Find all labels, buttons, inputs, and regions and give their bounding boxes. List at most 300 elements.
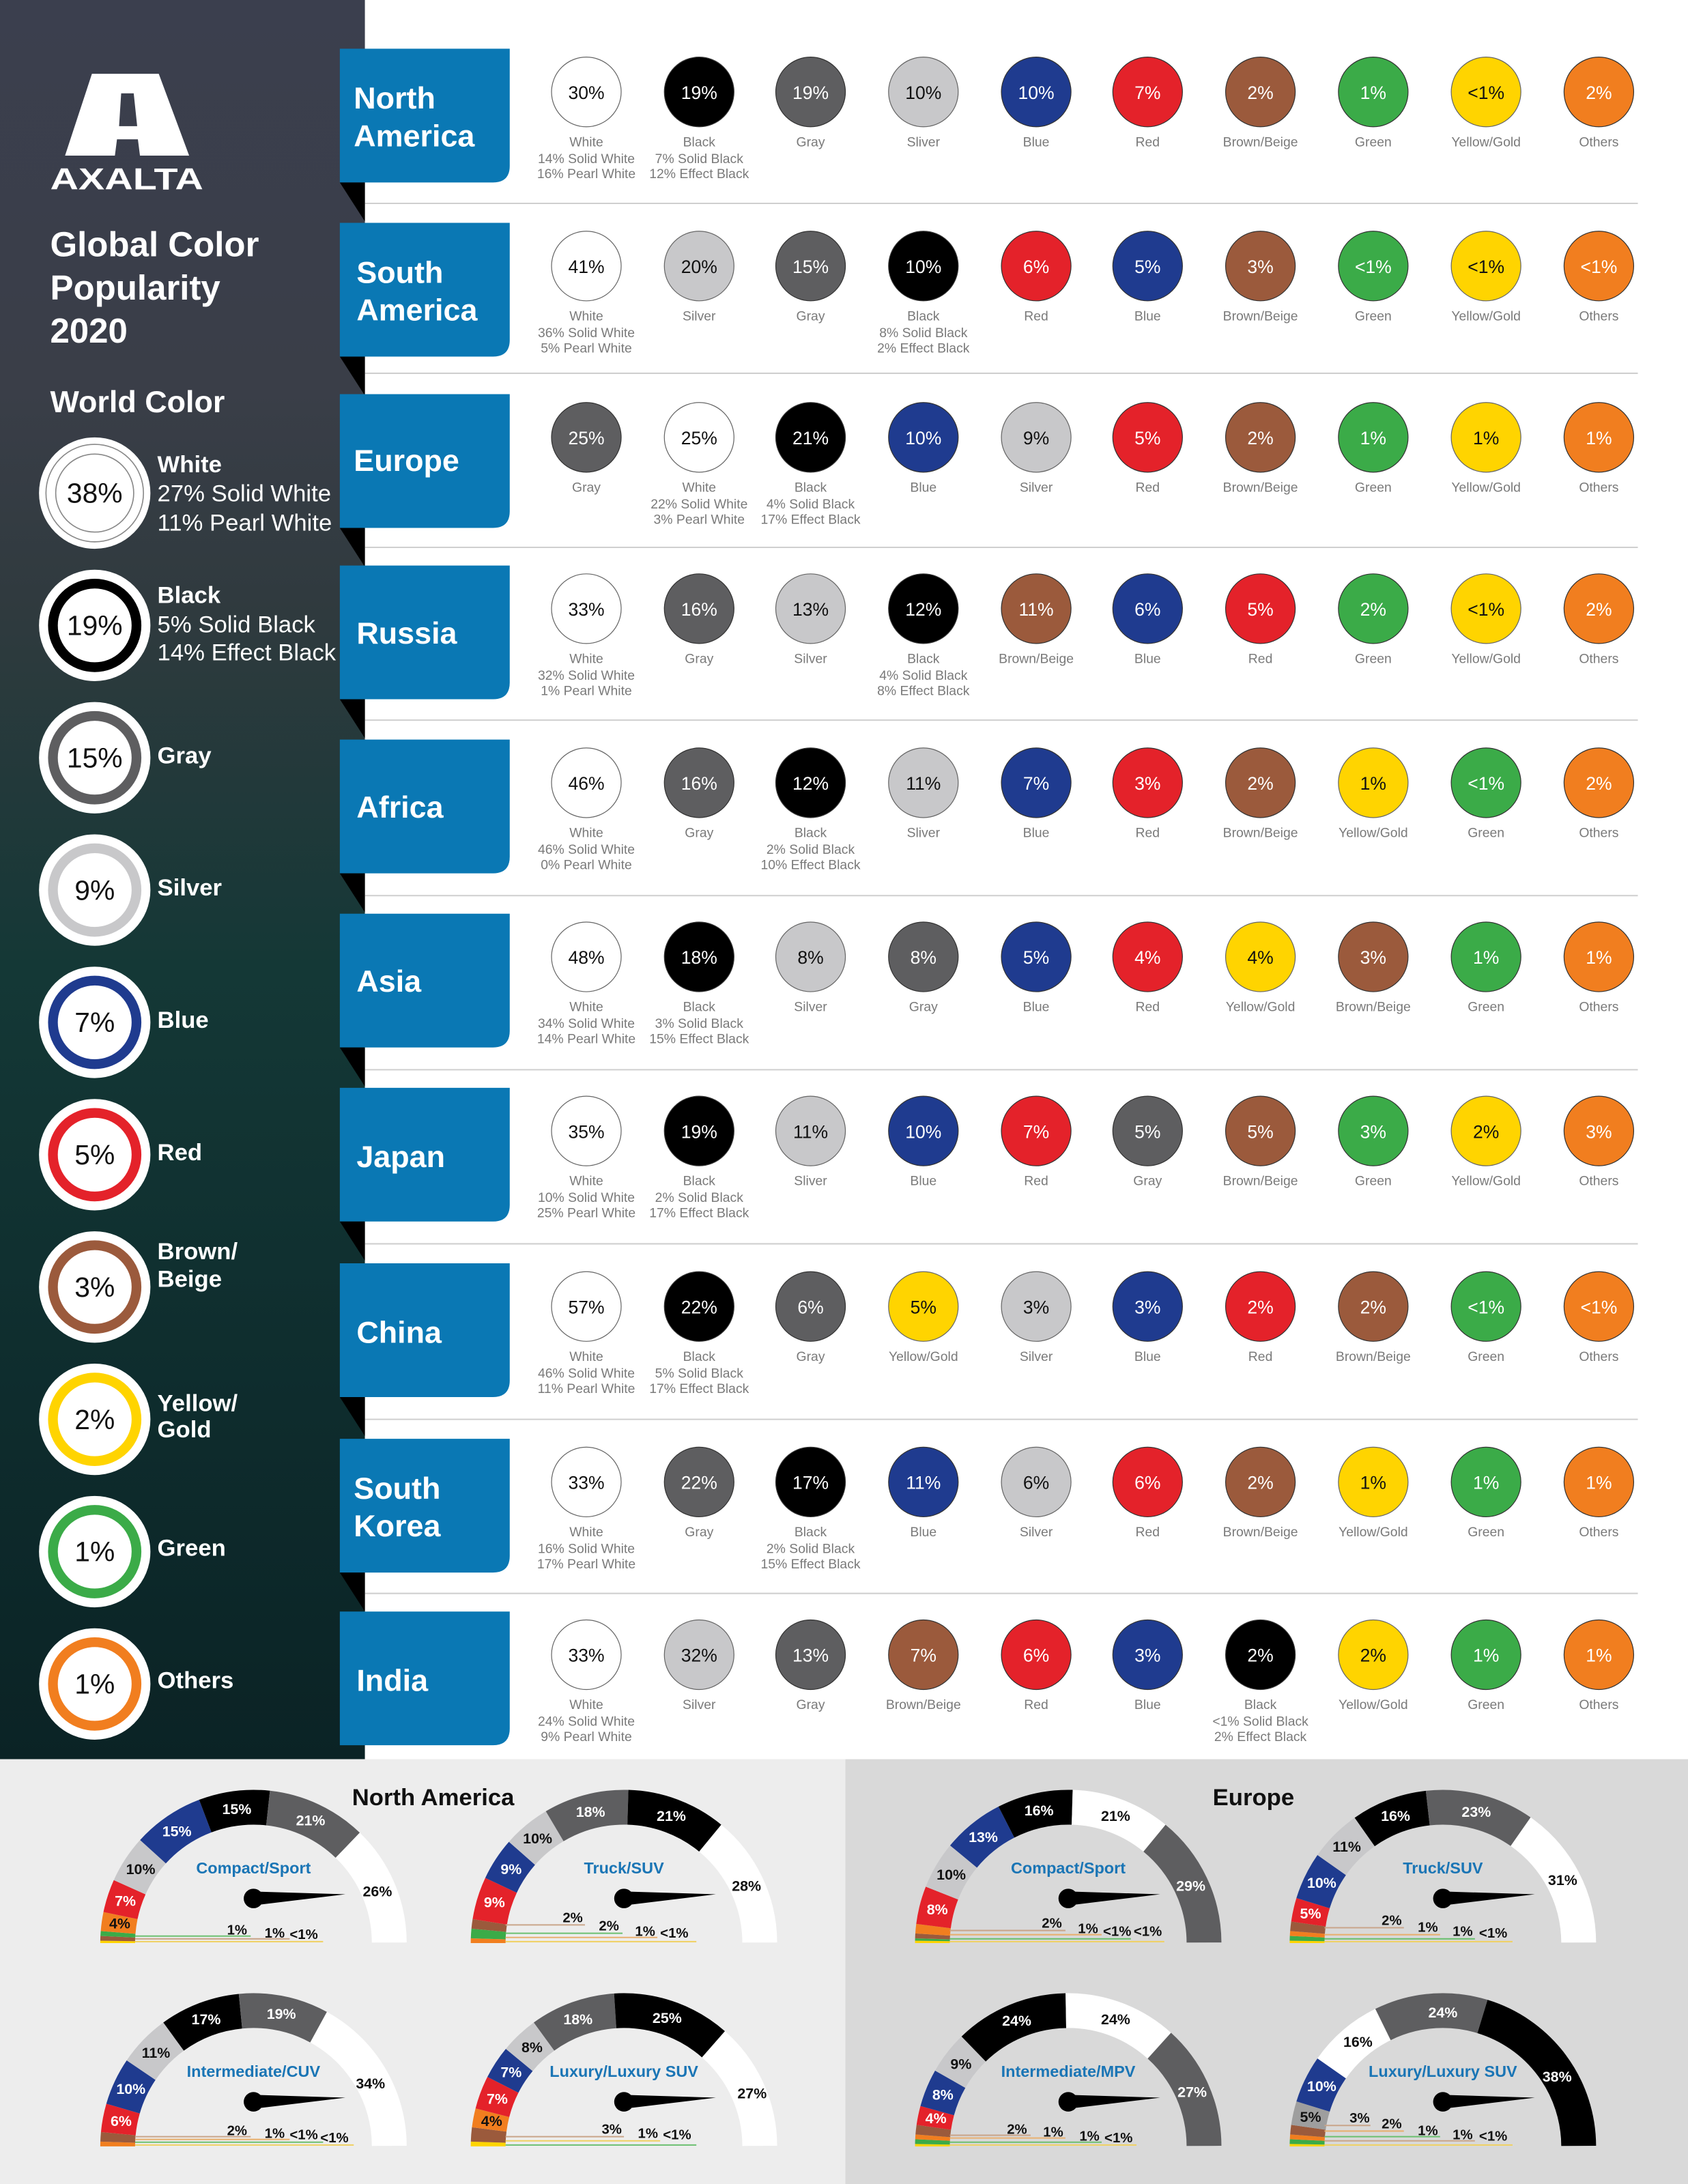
panel: Japan: Blue — [910, 1174, 936, 1189]
panel: South Korea: Brown/Beige — [1223, 1525, 1298, 1540]
title: 2020 — [50, 311, 128, 350]
panel: South America: Blue — [1134, 308, 1161, 324]
panel: North America: Sliver — [907, 134, 941, 149]
panel: India: <1% Solid Black — [1212, 1714, 1308, 1729]
gauge: Luxury/Luxury SUV EU: 5% — [1300, 2109, 1321, 2125]
panel: Africa: 10% Effect Black — [760, 857, 861, 872]
gauge: Luxury/Luxury SUV NA: 25% — [653, 2010, 682, 2026]
panel: North America: <1% — [1468, 83, 1504, 103]
gauge: Compact/Sport EU: 13% — [969, 1829, 998, 1845]
panel: Africa: Sliver — [907, 826, 941, 841]
panel: Russia: Gray — [685, 651, 714, 666]
panel: North America: 2% — [1586, 83, 1612, 103]
panel: Russia: Silver — [794, 651, 827, 666]
panel: Russia: White — [569, 651, 603, 666]
panel: Asia: 5% — [1023, 947, 1049, 968]
panel: North America: 10% — [905, 83, 941, 103]
world ring: silver: Silver — [158, 875, 222, 901]
gauge: Intermediate/CUV NA: 11% — [142, 2045, 170, 2061]
panel: Russia: Brown/Beige — [999, 651, 1074, 666]
panel: Europe: 1% — [1473, 428, 1499, 448]
panel: India: 32% — [681, 1646, 717, 1666]
panel: Asia: Gray — [909, 1000, 938, 1015]
gauge: Intermediate/CUV NA: 34% — [356, 2075, 385, 2092]
panel: Europe: Others — [1579, 480, 1618, 495]
panel: Europe: White — [683, 480, 716, 495]
gauge: Luxury/Luxury SUV EU: 38% — [1543, 2069, 1572, 2085]
panel: India: Gray — [797, 1697, 825, 1712]
left panel background — [0, 0, 365, 1759]
panel: India: 3% — [1134, 1646, 1160, 1666]
panel: Europe: Blue — [910, 480, 936, 495]
panel: Japan: 2% Solid Black — [655, 1190, 743, 1205]
panel: South America: Others — [1579, 308, 1618, 324]
panel: China: 3% — [1023, 1297, 1049, 1317]
panel: South Korea: 15% Effect Black — [760, 1557, 861, 1572]
panel: South America: 2% Effect Black — [877, 341, 970, 356]
panel: China: <1% — [1468, 1297, 1504, 1317]
gauge: Compact/Sport NA — [109, 1801, 392, 1943]
panel: South America: 3% — [1247, 257, 1274, 277]
panel: North America: 16% Pearl White — [537, 167, 635, 182]
panel: Africa: 46% — [568, 773, 605, 794]
gauge: Luxury/Luxury SUV NA: 7% — [487, 2091, 508, 2108]
gauge: Intermediate/MPV EU — [926, 2011, 1207, 2146]
panel: Asia — [340, 914, 1633, 1087]
panel: North America: 1% — [1360, 83, 1386, 103]
panel: South America — [340, 223, 1633, 396]
panel: South Korea: 6% — [1023, 1473, 1049, 1493]
gauge: Compact/Sport NA: 1% — [227, 1923, 247, 1938]
panel: Russia: Yellow/Gold — [1451, 651, 1521, 666]
panel: South America: Gray — [797, 308, 825, 324]
panel: Africa: 2% Solid Black — [767, 842, 855, 857]
panel: North America: 12% Effect Black — [649, 167, 749, 182]
gauge: Compact/Sport NA: 7% — [115, 1893, 136, 1910]
panel: Europe: 9% — [1023, 428, 1049, 448]
panel: China: 5% — [911, 1297, 936, 1317]
panel: Asia: White — [569, 1000, 603, 1015]
panel: China: 17% Effect Black — [649, 1381, 749, 1396]
gauge: Luxury/Luxury SUV NA: <1% — [663, 2128, 691, 2143]
panel: China: 6% — [797, 1297, 824, 1317]
gauge: Truck/SUV NA: <1% — [660, 1926, 689, 1941]
panel: Asia: 8% — [911, 947, 936, 968]
panel: Africa: 0% Pearl White — [541, 857, 632, 872]
panel: South America: Yellow/Gold — [1451, 308, 1521, 324]
world ring: green: 1% — [74, 1536, 115, 1568]
gauge: Truck/SUV NA: 1% — [635, 1925, 655, 1940]
panel: Russia — [340, 566, 1633, 738]
gauge: Truck/SUV EU: <1% — [1479, 1926, 1507, 1941]
world ring: black: 19% — [67, 610, 123, 642]
panel: Russia: <1% — [1468, 599, 1504, 620]
panel: South Korea: 11% — [906, 1473, 941, 1493]
panel: Europe: 10% — [905, 428, 941, 448]
gauge: Intermediate/CUV NA: <1% — [289, 2128, 318, 2143]
panel: South Korea — [340, 1439, 1633, 1611]
panel: South America: 36% Solid White — [538, 326, 635, 341]
panel: Asia: 18% — [681, 947, 717, 968]
panel: India: 1% — [1473, 1646, 1499, 1666]
panel: India: Blue — [1134, 1697, 1161, 1712]
world ring: red: Red — [158, 1140, 202, 1166]
panel: Russia: 5% — [1247, 599, 1274, 620]
gauge: Truck/SUV EU: 1% — [1418, 1921, 1438, 1936]
gauge: Intermediate/CUV NA: 17% — [192, 2011, 220, 2028]
world ring: yellow: 2% — [74, 1404, 115, 1435]
panel: Russia: Red — [1248, 651, 1272, 666]
panel: Europe: 5% — [1134, 428, 1160, 448]
panel: North America: 7% Solid Black — [655, 152, 743, 167]
panel: Asia: 14% Pearl White — [537, 1032, 635, 1047]
panel: Africa — [340, 740, 1633, 913]
panel: South Korea: 17% — [792, 1473, 829, 1493]
title: Global Color — [50, 225, 259, 264]
panel: North America: Yellow/Gold — [1451, 134, 1521, 149]
gauge: Luxury/Luxury SUV EU: 1% — [1418, 2124, 1438, 2139]
world ring: silver: 9% — [74, 874, 115, 906]
panel: Africa: Others — [1579, 826, 1618, 841]
world ring: blue: Blue — [158, 1007, 209, 1033]
panel: South Korea: Others — [1579, 1525, 1618, 1540]
panel: India: Green — [1468, 1697, 1504, 1712]
panel: Russia: 6% — [1134, 599, 1160, 620]
world ring: yellow: Yellow/ — [158, 1390, 238, 1416]
gauge: Compact/Sport NA: Compact/Sport — [196, 1859, 311, 1877]
world ring: white: 27% Solid White — [158, 481, 331, 507]
panel: Europe: 1% — [1360, 428, 1386, 448]
panel: South America: 15% — [792, 257, 829, 277]
gauge: Truck/SUV EU: 10% — [1307, 1875, 1336, 1891]
panel: China: Red — [1248, 1349, 1272, 1364]
panel: China: 57% — [568, 1297, 605, 1317]
panel: Asia: Others — [1579, 1000, 1618, 1015]
panel: North America: North — [354, 81, 435, 115]
gauge: Luxury/Luxury SUV NA: 3% — [601, 2123, 622, 2138]
panel: India: Red — [1024, 1697, 1048, 1712]
gauge: Truck/SUV EU: 23% — [1461, 1804, 1491, 1820]
panel: Russia: 32% Solid White — [538, 668, 635, 683]
gauge: Intermediate/MPV EU: 2% — [1007, 2123, 1027, 2138]
panel: China: Silver — [1020, 1349, 1053, 1364]
world ring: green — [39, 1496, 226, 1607]
panel: Asia: 15% Effect Black — [649, 1032, 749, 1047]
gauge: Intermediate/MPV EU: 24% — [1002, 2013, 1031, 2029]
panel: Europe: 17% Effect Black — [760, 512, 861, 527]
panel: North America: 19% — [681, 83, 717, 103]
panel: India: 7% — [911, 1646, 936, 1666]
world ring: brown: Brown/ — [158, 1239, 238, 1265]
title — [50, 225, 259, 350]
panel: South America: Black — [907, 308, 940, 324]
panel: Japan: Brown/Beige — [1223, 1174, 1298, 1189]
heading: North America: North America — [352, 1785, 515, 1811]
panel: India: 2% — [1247, 1646, 1274, 1666]
panel: Japan: 10% Solid White — [538, 1190, 635, 1205]
panel: Europe: 25% — [681, 428, 717, 448]
panel: South America: 10% — [905, 257, 941, 277]
gauge: Intermediate/CUV NA: 19% — [267, 2006, 296, 2022]
panel: Europe gauges — [846, 1759, 1688, 2184]
panel: China: 2% — [1360, 1297, 1386, 1317]
panel: Asia: Blue — [1023, 1000, 1049, 1015]
panel: China: 5% Solid Black — [655, 1366, 743, 1381]
panel: Europe: Brown/Beige — [1223, 480, 1298, 495]
panel: Japan: 3% — [1586, 1121, 1612, 1142]
panel: Asia: Black — [683, 1000, 715, 1015]
panel: South America: Silver — [683, 308, 716, 324]
gauge: Truck/SUV NA: Truck/SUV — [584, 1859, 664, 1877]
panel: South America: 5% Pearl White — [541, 341, 632, 356]
panel: Asia: Yellow/Gold — [1226, 1000, 1295, 1015]
gauge: Intermediate/MPV EU: 1% — [1043, 2125, 1063, 2140]
gauge: Intermediate/MPV EU: <1% — [1104, 2131, 1132, 2146]
logo: Axalta — [50, 74, 203, 197]
gauge: Truck/SUV EU: 2% — [1382, 1913, 1402, 1928]
gauge: Truck/SUV EU: Truck/SUV — [1403, 1859, 1483, 1877]
world ring: black: 14% Effect Black — [158, 640, 337, 665]
panel: Asia: 8% — [797, 947, 824, 968]
panel: China: <1% — [1581, 1297, 1617, 1317]
panel: Europe: 25% — [568, 428, 605, 448]
panel: South Korea: 1% — [1586, 1473, 1612, 1493]
panel: India: Others — [1579, 1697, 1618, 1712]
panel: Russia: 1% Pearl White — [541, 683, 632, 698]
gauge: Intermediate/MPV EU: 9% — [950, 2056, 971, 2072]
gauge: Truck/SUV NA: 2% — [562, 1910, 583, 1925]
gauge: Truck/SUV NA: 18% — [576, 1804, 605, 1820]
panel: Asia: Red — [1136, 1000, 1160, 1015]
panel: China: Brown/Beige — [1336, 1349, 1411, 1364]
panel: South Korea: Korea — [354, 1508, 441, 1543]
panel: North America: 30% — [568, 83, 605, 103]
panel: Europe: 3% Pearl White — [654, 512, 745, 527]
panel: Europe: Silver — [1020, 480, 1053, 495]
panel: Russia: 4% Solid Black — [879, 668, 968, 683]
panel: India: 2% — [1360, 1646, 1386, 1666]
world ring: others: Others — [158, 1667, 233, 1693]
panel: Japan: Red — [1024, 1174, 1048, 1189]
panel: Russia: 8% Effect Black — [877, 683, 970, 698]
panel: China: Yellow/Gold — [889, 1349, 958, 1364]
panel: China: Gray — [797, 1349, 825, 1364]
world ring: red — [39, 1099, 202, 1210]
panel: Europe: Europe — [354, 443, 459, 478]
panel: Asia: 1% — [1586, 947, 1612, 968]
panel: Asia: 3% — [1360, 947, 1386, 968]
gauge: Luxury/Luxury SUV NA: 18% — [563, 2011, 592, 2028]
gauge: Intermediate/MPV EU: 1% — [1079, 2129, 1100, 2144]
panel: India: 24% Solid White — [538, 1714, 635, 1729]
panel: South Korea: White — [569, 1525, 603, 1540]
world ring: white: 38% — [67, 478, 123, 509]
panel: Africa: White — [569, 826, 603, 841]
gauge: Luxury/Luxury SUV EU: 16% — [1343, 2034, 1373, 2050]
world ring: gray: 15% — [67, 742, 123, 773]
world ring: black: Black — [158, 583, 221, 609]
panel: North America: Black — [683, 134, 715, 149]
panel: Asia: 4% — [1247, 947, 1274, 968]
gauge: Intermediate/MPV EU: 4% — [926, 2110, 947, 2127]
panel: Japan: 19% — [681, 1121, 717, 1142]
panel: Japan: Green — [1355, 1174, 1392, 1189]
panel: Japan: White — [569, 1174, 603, 1189]
gauge: Truck/SUV NA: 10% — [523, 1830, 552, 1847]
gauge: Luxury/Luxury SUV NA: 1% — [638, 2127, 658, 2142]
world ring: yellow: Gold — [158, 1417, 212, 1443]
gauge: Truck/SUV NA: 21% — [657, 1808, 686, 1824]
panel: North America: Others — [1579, 134, 1618, 149]
gauge: Truck/SUV NA: 9% — [484, 1895, 505, 1911]
panel: Africa: Africa — [356, 790, 444, 824]
panel: Japan: 25% Pearl White — [537, 1206, 635, 1221]
panel: Africa: 12% — [792, 773, 829, 794]
panel: India: Brown/Beige — [886, 1697, 961, 1712]
panel: India: 33% — [568, 1646, 605, 1666]
world ring: gray: Gray — [158, 743, 212, 768]
gauge: Luxury/Luxury SUV NA: Luxury/Luxury SUV — [549, 2063, 698, 2080]
panel: India: White — [569, 1697, 603, 1712]
gauge: Compact/Sport EU — [927, 1802, 1205, 1943]
gauge: Intermediate/CUV NA: <1% — [320, 2131, 349, 2146]
panel: India: 13% — [792, 1646, 829, 1666]
gauge: Truck/SUV EU: 16% — [1381, 1808, 1410, 1824]
panel: South Korea: Green — [1468, 1525, 1504, 1540]
gauge: Compact/Sport EU: 2% — [1042, 1916, 1062, 1931]
gauge: Truck/SUV NA: 28% — [732, 1878, 761, 1894]
panel: North America: America — [354, 118, 475, 153]
gauge: Intermediate/MPV EU: 27% — [1177, 2084, 1207, 2100]
world ring: blue: 7% — [74, 1007, 115, 1038]
panel: South Korea: 33% — [568, 1473, 605, 1493]
panel: Asia: Green — [1468, 1000, 1504, 1015]
gauge: Luxury/Luxury SUV NA — [481, 2010, 767, 2146]
panel: China: Green — [1468, 1349, 1504, 1364]
world ring: white — [39, 437, 332, 549]
gauge: Compact/Sport EU: Compact/Sport — [1011, 1859, 1126, 1877]
panel: Japan: Others — [1579, 1174, 1618, 1189]
panel: South America: <1% — [1355, 257, 1392, 277]
panel: Russia: Black — [907, 651, 940, 666]
panel: China: White — [569, 1349, 603, 1364]
gauge: Compact/Sport NA: 15% — [162, 1824, 192, 1840]
panel: North America: White — [569, 134, 603, 149]
panel: Europe: 21% — [792, 428, 829, 448]
panel: India: Yellow/Gold — [1339, 1697, 1408, 1712]
panel: South America: 5% — [1134, 257, 1160, 277]
panel: Asia: 4% — [1134, 947, 1160, 968]
world ring: green: Green — [158, 1536, 226, 1562]
gauge: Truck/SUV EU: 11% — [1332, 1839, 1361, 1855]
title: Popularity — [50, 268, 220, 307]
panel: Africa: Blue — [1023, 826, 1049, 841]
panel: Asia: 1% — [1473, 947, 1499, 968]
panel: South Korea: 16% Solid White — [538, 1542, 635, 1557]
panel: Japan: 11% — [793, 1121, 828, 1142]
panel: South Korea: Black — [795, 1525, 827, 1540]
panel: Russia: 2% — [1360, 599, 1386, 620]
heading: Europe: Europe — [1213, 1785, 1294, 1811]
panel: Russia: Others — [1579, 651, 1618, 666]
panel: China — [340, 1263, 1633, 1436]
gauge: Compact/Sport EU: 1% — [1078, 1922, 1098, 1937]
panel: China: Blue — [1134, 1349, 1161, 1364]
panel: North America: 14% Solid White — [538, 152, 635, 167]
world ring: blue — [39, 966, 209, 1078]
panel: Asia: 48% — [568, 947, 605, 968]
gauge: Intermediate/CUV NA: 1% — [265, 2127, 285, 2142]
panel: China: 11% Pearl White — [538, 1381, 635, 1396]
gauge: Compact/Sport NA: 15% — [222, 1801, 251, 1817]
panel: India: India — [356, 1663, 429, 1698]
panel: South America: 20% — [681, 257, 717, 277]
gauge: Truck/SUV EU: 1% — [1453, 1925, 1473, 1940]
world ring: black: 5% Solid Black — [158, 612, 316, 638]
panel: Russia: Blue — [1134, 651, 1161, 666]
gauge: Luxury/Luxury SUV EU: 3% — [1349, 2111, 1370, 2126]
panel: South Korea: Silver — [1020, 1525, 1053, 1540]
panel: Japan: Yellow/Gold — [1451, 1174, 1521, 1189]
panel: Japan: 7% — [1023, 1121, 1049, 1142]
gauge: Truck/SUV EU — [1300, 1804, 1579, 1943]
panel: Russia: 11% — [1019, 599, 1054, 620]
panel: South America: <1% — [1581, 257, 1617, 277]
gauge: Luxury/Luxury SUV EU: 24% — [1428, 2005, 1457, 2021]
gauge: Luxury/Luxury SUV EU: 10% — [1307, 2078, 1336, 2095]
panel: South America: Brown/Beige — [1223, 308, 1298, 324]
gauge: Compact/Sport EU: 29% — [1176, 1878, 1205, 1894]
panel: India: 9% Pearl White — [541, 1729, 632, 1744]
panel: South America: Green — [1355, 308, 1392, 324]
panel: South Korea: 2% — [1247, 1473, 1274, 1493]
gauge: Compact/Sport NA: 26% — [363, 1883, 392, 1899]
panel: China: 2% — [1247, 1297, 1274, 1317]
panel: North America: 2% — [1247, 83, 1274, 103]
panel: North America: Red — [1136, 134, 1160, 149]
gauge: Truck/SUV NA: 9% — [500, 1861, 521, 1878]
panel: Japan: Gray — [1133, 1174, 1162, 1189]
world ring: brown: 3% — [74, 1271, 115, 1303]
panel: India — [340, 1611, 1633, 1745]
gauge: Intermediate/MPV EU: Intermediate/MPV — [1001, 2063, 1136, 2080]
panel: Africa: Black — [795, 826, 827, 841]
world ring: others — [39, 1628, 233, 1740]
panel: South America: 8% Solid Black — [879, 326, 968, 341]
gauge: Compact/Sport EU: <1% — [1134, 1925, 1162, 1940]
panel: China: 3% — [1134, 1297, 1160, 1317]
panel: China: 22% — [681, 1297, 717, 1317]
panel: Russia: 33% — [568, 599, 605, 620]
gauge: Luxury/Luxury SUV EU: 2% — [1382, 2116, 1402, 2131]
panel: India: Silver — [683, 1697, 716, 1712]
gauge: Compact/Sport NA: <1% — [289, 1927, 318, 1942]
gauge: Compact/Sport EU: 10% — [936, 1867, 966, 1883]
panel: India: 6% — [1023, 1646, 1049, 1666]
panel: South Korea: South — [354, 1471, 440, 1506]
panel: Russia: 13% — [792, 599, 829, 620]
panel: Japan: 10% — [905, 1121, 941, 1142]
panel: Japan: 5% — [1134, 1121, 1160, 1142]
panel: North America: Blue — [1023, 134, 1049, 149]
panel: Russia: Green — [1355, 651, 1392, 666]
panel: South Korea: Red — [1136, 1525, 1160, 1540]
panel: South America: 6% — [1023, 257, 1049, 277]
world ring: others: 1% — [74, 1669, 115, 1700]
panel: Europe: Gray — [572, 480, 601, 495]
panel: North America: 10% — [1018, 83, 1055, 103]
panel: South America: 41% — [568, 257, 605, 277]
